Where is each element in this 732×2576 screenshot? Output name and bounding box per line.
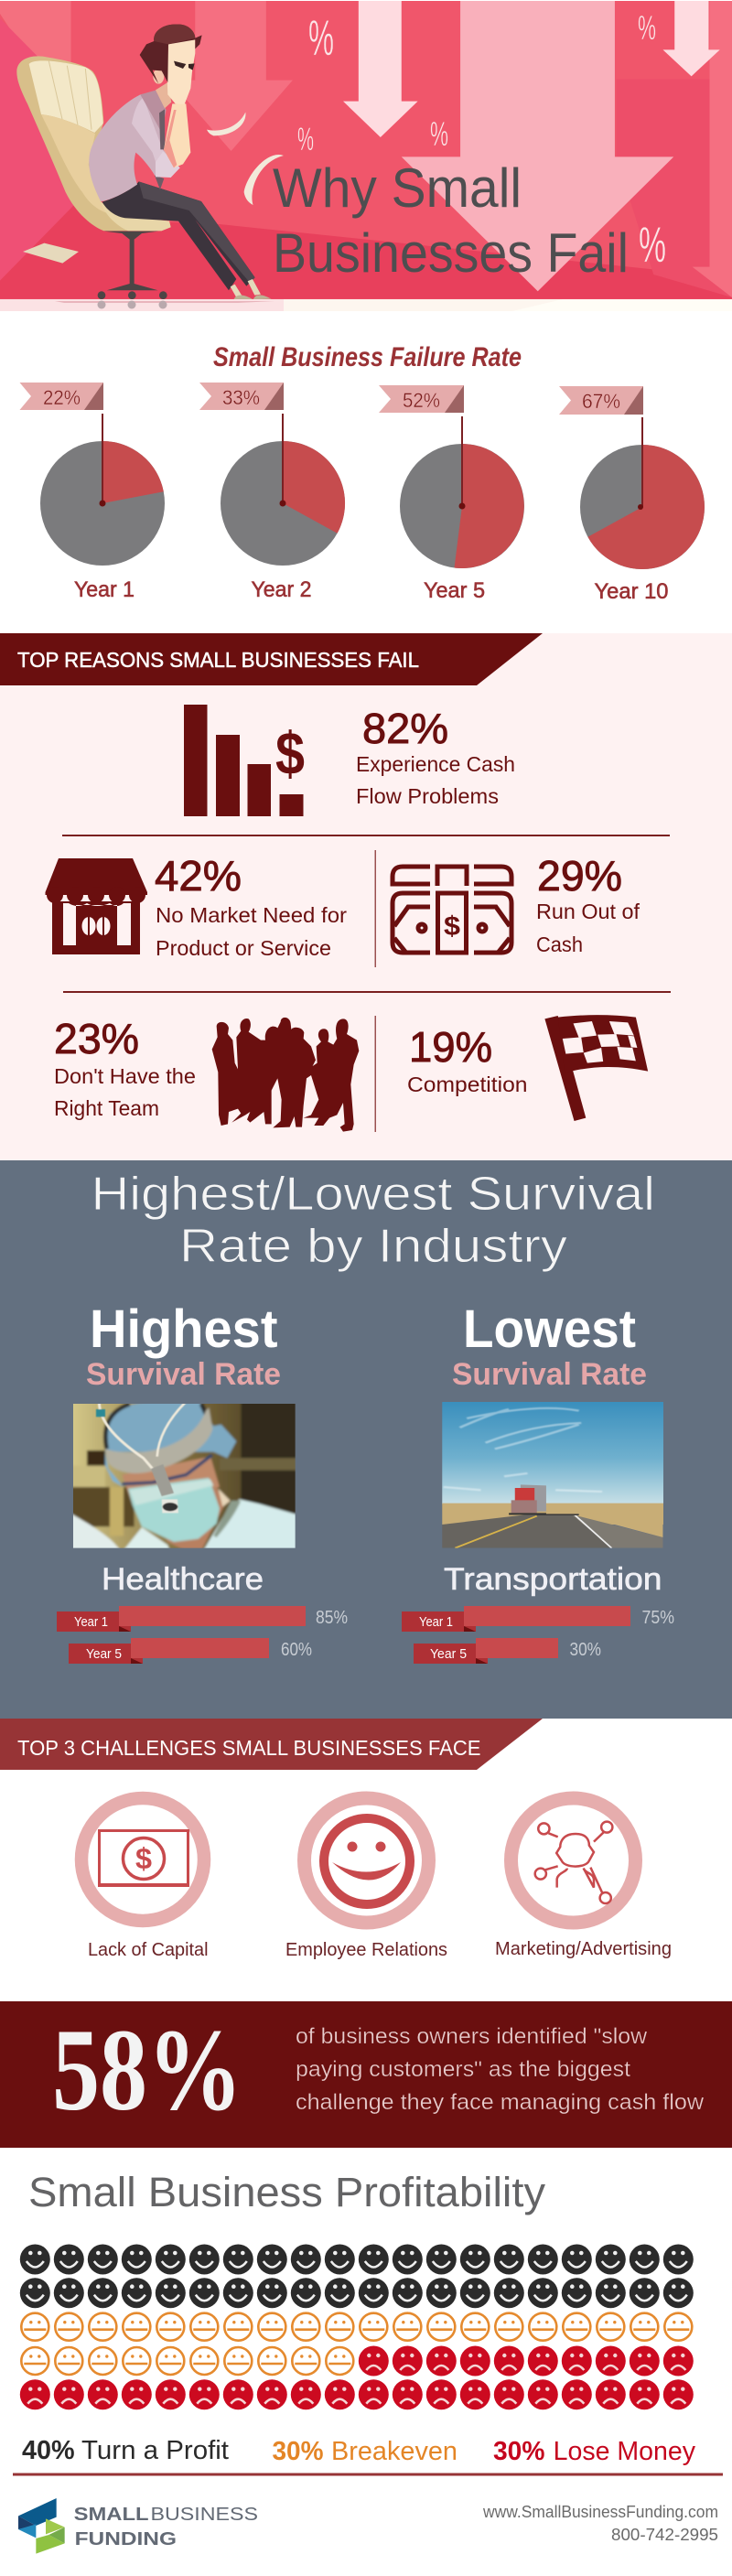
callout text: challenge they face managing cash flow <box>296 2090 705 2115</box>
stat: 82 percent: Experience Cash <box>356 752 515 776</box>
bar: healthcare year 1: 85% <box>316 1608 348 1628</box>
icon: lack of capital: $ <box>135 1842 152 1875</box>
legend: lose money <box>493 2437 695 2466</box>
heading: survival rate <box>92 1168 655 1273</box>
bar: transportation year 1: Year 1 <box>419 1614 453 1630</box>
website and phone: 800-742-2995 <box>611 2526 718 2544</box>
arrow: pale centre <box>343 1 418 137</box>
bar: transportation year 5: Year 5 <box>430 1646 467 1662</box>
labels: three challenges: Lack of Capital <box>88 1940 209 1960</box>
main title <box>273 157 629 284</box>
icon: storefront <box>46 858 147 954</box>
icon: banknotes <box>393 867 511 953</box>
panel: top 3 challenges <box>0 1719 672 1960</box>
percent signs: % <box>308 9 334 66</box>
bar: healthcare year 5: 60% <box>281 1640 312 1660</box>
stat: 19 percent: 19% <box>409 1023 492 1071</box>
stat: 23 percent: 23% <box>54 1015 139 1062</box>
banner heading: top reasons: TOP REASONS SMALL BUSINESSES FAIL <box>17 648 419 672</box>
bar: transportation year 5: 30% <box>569 1640 601 1660</box>
big number: 58% <box>52 2005 242 2135</box>
column: lowest: Lowest <box>463 1299 636 1359</box>
office chair <box>16 56 171 299</box>
floating papers <box>23 113 284 264</box>
pie: year 2: Year 2 <box>251 577 311 602</box>
floor strip <box>0 299 732 311</box>
stat: 29 percent <box>536 852 640 956</box>
legend: breakeven <box>273 2437 458 2466</box>
man in chair illustration <box>16 24 284 300</box>
percent signs: % <box>639 216 666 273</box>
labels: three challenges: Employee Relations <box>285 1940 447 1960</box>
logo wordmark <box>74 2505 258 2549</box>
arrow: large <box>402 1 673 291</box>
stat: 19 percent: Competition <box>407 1072 527 1096</box>
bar: transportation year 1: 75% <box>642 1608 674 1628</box>
stat: 29 percent: Run Out of <box>536 900 640 923</box>
stat: 19 percent <box>407 1023 527 1096</box>
main title: Businesses Fail <box>273 222 629 284</box>
icon: banknotes: $ <box>444 911 460 942</box>
pictogram: smiley grid <box>20 2244 694 2409</box>
hero background shapes <box>0 1 732 299</box>
heading: survival rate: Rate by Industry <box>179 1220 567 1273</box>
heading: survival rate: Highest/Lowest Survival <box>92 1168 655 1221</box>
bar: healthcare year 1: Year 1 <box>74 1614 108 1630</box>
panel: small business failure rate <box>20 342 705 604</box>
man figure <box>89 24 272 300</box>
stat: 42 percent: 42% <box>155 852 242 900</box>
pie: year 2: 33% <box>222 386 260 409</box>
pie: year 2 <box>199 383 345 602</box>
banner heading: challenges <box>0 1719 543 1770</box>
percent signs: % <box>430 115 448 153</box>
icon: employee relations smiley <box>304 1798 428 1923</box>
website and phone <box>482 2503 718 2544</box>
icon: falling bars with dollar: $ <box>275 719 305 787</box>
label: transportation: Transportation <box>444 1562 662 1597</box>
callout text: paying customers" as the biggest <box>296 2057 630 2082</box>
pie: year 5: 52% <box>403 389 440 412</box>
photo: truck on highway <box>442 1402 663 1548</box>
legend: breakeven: Breakeven <box>331 2437 458 2466</box>
callout text: of business owners identified "slow <box>296 2024 648 2049</box>
icon: team silhouettes <box>212 1018 359 1132</box>
icon: marketing network person <box>511 1798 635 1923</box>
arrow: pale top right <box>662 1 720 76</box>
stat: 23 percent: Right Team <box>54 1096 159 1120</box>
banner heading: challenges: TOP 3 CHALLENGES SMALL BUSINESSES FACE <box>17 1736 481 1760</box>
label: healthcare: Healthcare <box>102 1562 264 1597</box>
column: highest: Survival Rate <box>86 1357 281 1392</box>
panel: survival rate by industry <box>0 1160 732 1719</box>
column: lowest <box>402 1299 674 1664</box>
banner heading: top reasons <box>0 633 543 685</box>
stat: 42 percent: No Market Need for <box>156 903 347 927</box>
legend: breakeven: 30% <box>273 2437 324 2466</box>
logo wordmark: SMALL <box>74 2505 149 2525</box>
labels: three challenges <box>88 1939 672 1960</box>
bar: healthcare year 5: Year 5 <box>86 1646 122 1662</box>
column: highest: Highest <box>90 1299 278 1359</box>
stat: 23 percent: Don't Have the <box>54 1064 196 1088</box>
pie: year 1: Year 1 <box>74 577 135 602</box>
pie: year 10 <box>559 386 705 604</box>
callout text <box>296 2024 705 2115</box>
photo: surgeon <box>73 1404 296 1548</box>
logo mark <box>18 2498 65 2554</box>
pie: year 5: Year 5 <box>424 578 485 603</box>
percent signs: % <box>638 9 656 47</box>
column: highest <box>57 1299 348 1664</box>
pie: year 10: 67% <box>582 390 620 413</box>
main title: Why Small <box>273 157 522 219</box>
logo wordmark: FUNDING <box>75 2529 177 2549</box>
website and phone: www.SmallBusinessFunding.com <box>482 2503 718 2521</box>
stat: 42 percent: Product or Service <box>156 936 331 960</box>
column: lowest: Survival Rate <box>452 1357 647 1392</box>
legend: turn a profit: 40% <box>22 2436 75 2465</box>
heading: profitability: Small Business Profitability <box>28 2169 546 2215</box>
arrow: medium pink <box>169 1 293 151</box>
legend: lose money: 30% <box>493 2437 545 2466</box>
bar: healthcare year 1 <box>57 1606 348 1632</box>
stat: 23 percent <box>54 1015 196 1120</box>
bar: transportation year 5 <box>414 1638 601 1664</box>
icon: lack of capital <box>81 1798 204 1921</box>
hero banner <box>0 1 732 311</box>
icon: checkered flag <box>544 1015 648 1121</box>
footer <box>18 2498 718 2554</box>
pie: year 1: 22% <box>43 386 81 409</box>
stat: 82 percent <box>356 705 515 808</box>
icon: falling bars with dollar <box>184 705 305 816</box>
heading: failure rate: Small Business Failure Rate <box>213 342 522 372</box>
bar: healthcare year 5 <box>69 1638 312 1664</box>
pie: year 10: Year 10 <box>595 579 668 604</box>
panel: top reasons <box>0 633 732 1160</box>
stat: 82 percent: Flow Problems <box>356 784 499 808</box>
panel: 58 percent callout <box>0 2001 732 2148</box>
logo wordmark: BUSINESS <box>150 2505 258 2525</box>
stat: 82 percent: 82% <box>362 705 448 752</box>
pie: year 1 <box>20 383 165 602</box>
pie: year 5 <box>379 385 524 603</box>
labels: three challenges: Marketing/Advertising <box>495 1939 672 1959</box>
percent signs: % <box>297 122 314 157</box>
stat: 29 percent: 29% <box>537 852 622 900</box>
stat: 42 percent <box>155 852 347 960</box>
stat: 29 percent: Cash <box>536 932 583 956</box>
percent signs <box>297 9 666 273</box>
bar: transportation year 1 <box>402 1606 674 1632</box>
legend: turn a profit: Turn a Profit <box>81 2436 229 2465</box>
panel: small business profitability <box>13 2169 723 2476</box>
legend: lose money: Lose Money <box>554 2437 695 2466</box>
